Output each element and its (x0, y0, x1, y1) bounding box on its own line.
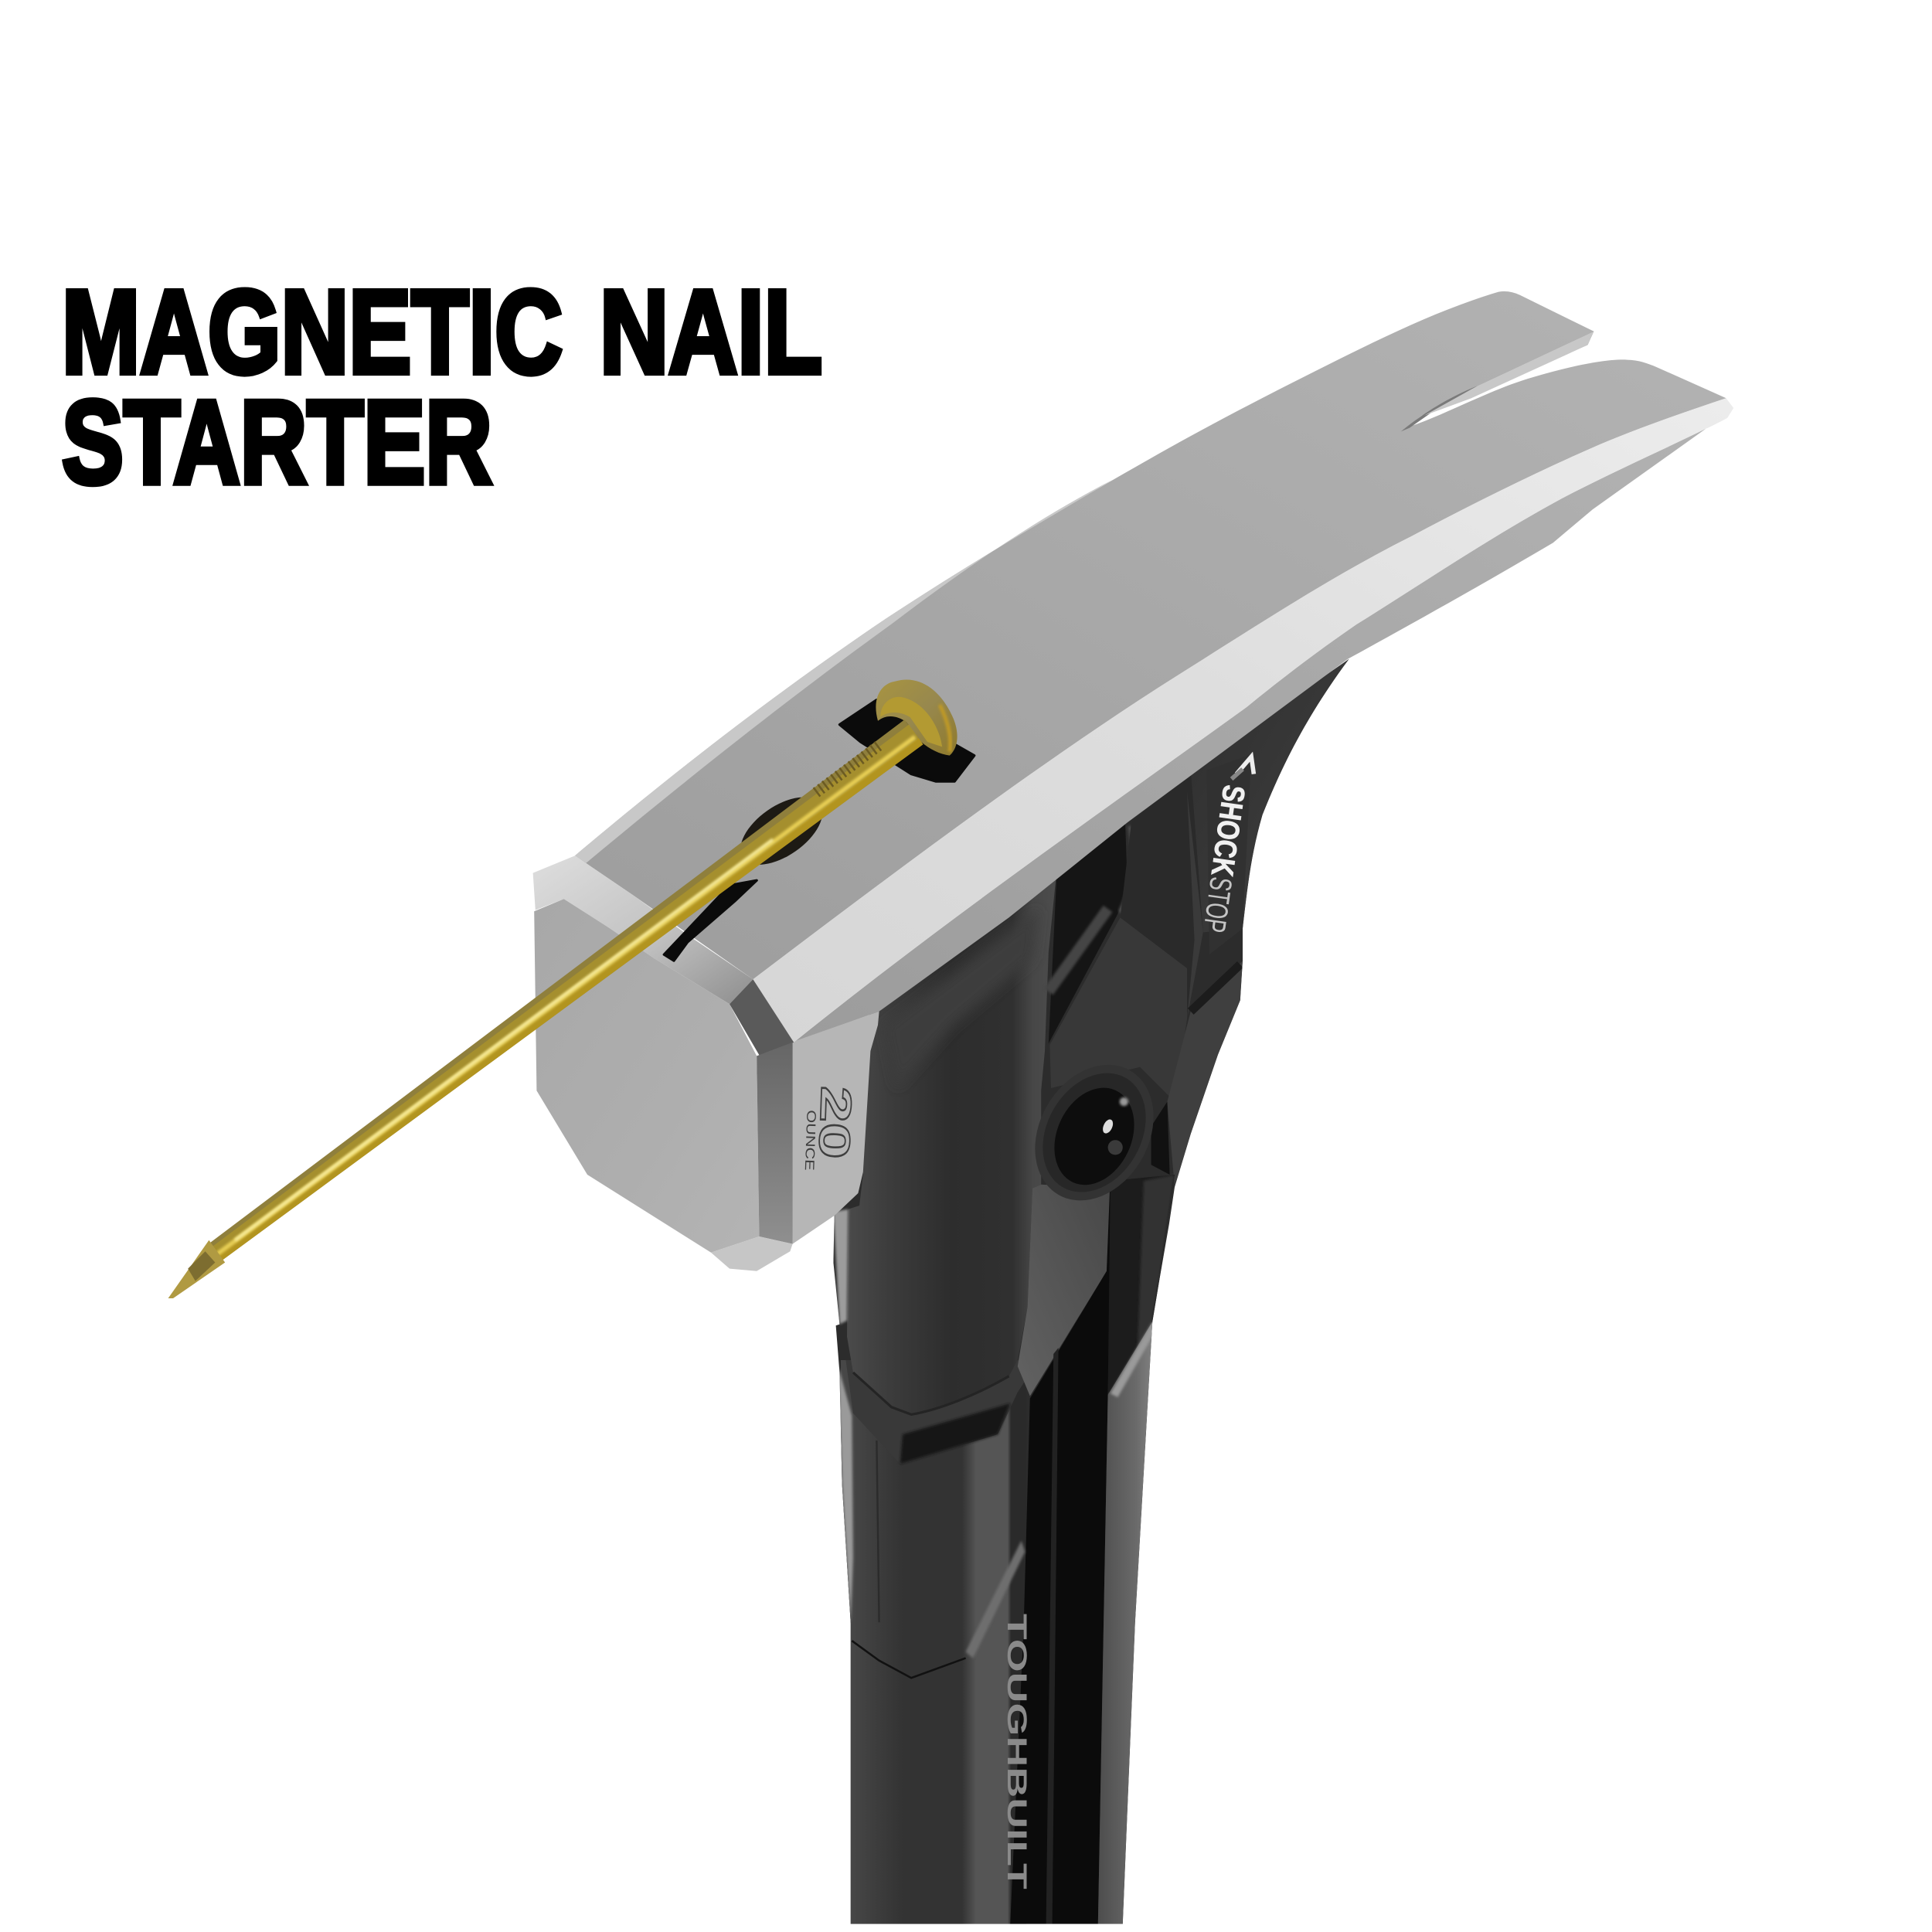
dark chamfer (730, 979, 794, 1057)
lower left grip (841, 1360, 1026, 1931)
label: ShockStop: SHOCK (1205, 783, 1251, 879)
right upper column (1108, 1175, 1175, 1393)
right shoulder (1167, 961, 1243, 1187)
centre plate below screw (1018, 1185, 1111, 1396)
strike face (534, 899, 759, 1253)
nail knurl (816, 744, 880, 793)
weight label: 20 ounce (802, 1085, 861, 1172)
label: Toughbuilt: TOUGHBUILT (1002, 1614, 1032, 1890)
dark strip (757, 1043, 793, 1244)
nail tip (168, 1240, 225, 1298)
cheek (791, 1012, 879, 1244)
shock stop strip (1219, 866, 1246, 930)
label: ShockStop (1196, 783, 1251, 934)
side grip panel line (876, 1440, 879, 1622)
weight label: 20 ounce: OUNCE (802, 1110, 818, 1171)
central plate (1049, 917, 1187, 1102)
icon: shock stop logo (1232, 757, 1253, 779)
hammer head steel (533, 291, 1733, 1271)
nail shaft (210, 719, 923, 1260)
window in handle (1049, 822, 1133, 1043)
right lower strip (1098, 1321, 1152, 1924)
top surface with claw (575, 291, 1726, 979)
lighter upper wedge on grip block (914, 930, 1017, 1053)
highlight on upper grip (833, 1209, 849, 1325)
diagonal grip highlight (966, 1541, 1025, 1658)
screw with washer (1012, 1043, 1177, 1222)
bottom chamfer (711, 1236, 793, 1271)
textured band (845, 1360, 1039, 1464)
hammer handle (816, 643, 1360, 1931)
nail head (876, 679, 957, 756)
product image: hammer with magnetic nail starter (62, 287, 1733, 1924)
left edge highlight (838, 1366, 853, 1624)
title: Magnetic Nail Starter: NAIL (600, 265, 822, 398)
bright bevel (753, 398, 1733, 1043)
upper rim of grip block (853, 1372, 1009, 1414)
back and front upper chamfer (533, 855, 753, 1004)
inner strip next to shock stop (1121, 825, 1136, 913)
title: Magnetic Nail Starter: MAGNETIC (62, 265, 563, 398)
title: Magnetic Nail Starter (62, 265, 822, 509)
title: Magnetic Nail Starter: STARTER (62, 376, 492, 509)
black channel (1010, 1175, 1113, 1924)
side face (794, 418, 1727, 1043)
nail (168, 679, 957, 1298)
claw fin (1191, 659, 1349, 932)
label: ShockStop: STOP (1196, 875, 1238, 934)
light upper edge (575, 480, 1113, 863)
magnet slot (664, 700, 975, 961)
seam line on grip (852, 1641, 966, 1678)
left grip block (847, 866, 1057, 1414)
weight label: 20 ounce: 20 (810, 1085, 861, 1160)
slit in claw (1401, 332, 1594, 431)
